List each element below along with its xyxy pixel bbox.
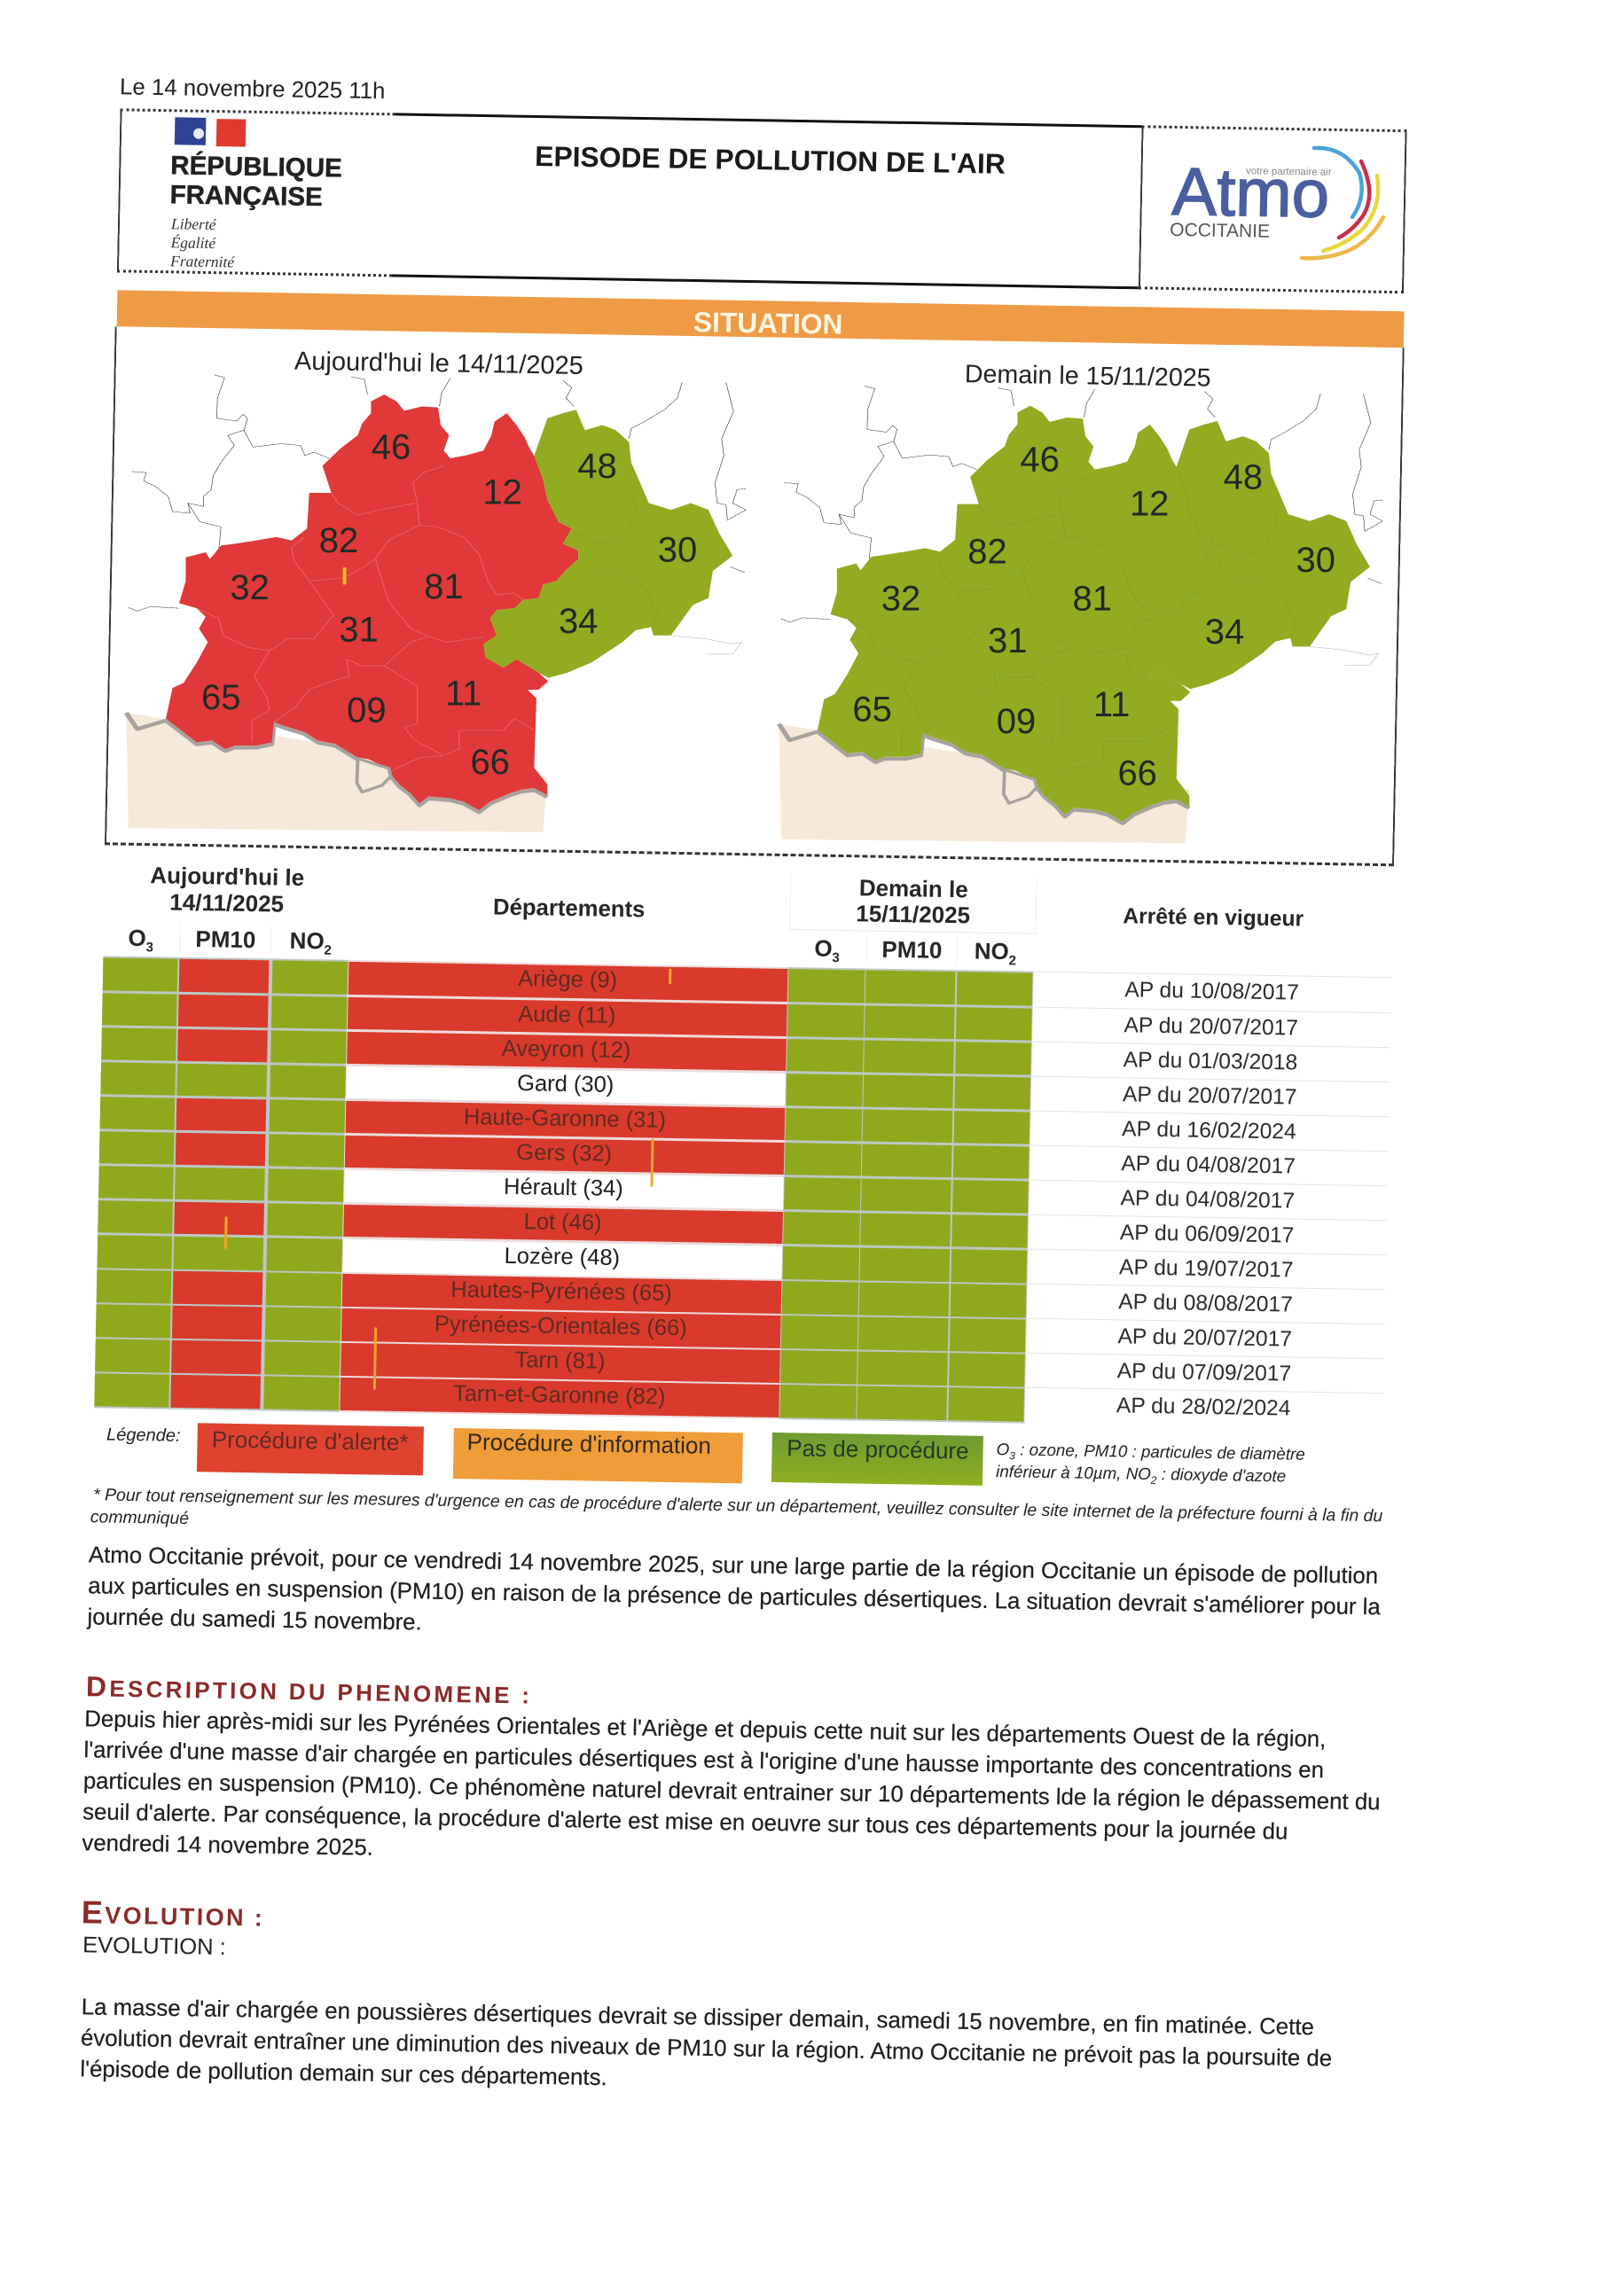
row: Tarn-et-Garonne: AP du 28/02/2024: [1116, 1394, 1291, 1421]
row: Pyrénées-Orientales: [96, 1304, 1390, 1358]
table head: tomorrow NO2: NO2: [974, 937, 1016, 968]
row: Tarn: Tarn (81): [514, 1347, 606, 1374]
legend note: O3 : ozone, PM10 : particules de diamètre: [996, 1440, 1305, 1464]
legend item: alert: [196, 1424, 424, 1476]
bar label: SITUATION: [693, 306, 843, 340]
legend item: none: Pas de procédure: [787, 1435, 969, 1464]
title: EPISODE DE POLLUTION DE L'AIR: [535, 140, 1006, 180]
row: Aveyron: Aveyron (12): [502, 1035, 631, 1063]
evolution paragraph: évolution devrait entraîner une diminution des niveaux de PM10 sur la région. Atmo Occitanie ne prévoit pas la poursuite de: [81, 2026, 1332, 2072]
row: Tarn: [95, 1339, 1390, 1393]
icon: Atmo arcs: [1295, 142, 1392, 266]
map numbers tomorrow: 34: [1205, 613, 1244, 652]
map numbers tomorrow: [852, 440, 1335, 793]
row: Gard: Gard (30): [517, 1071, 615, 1097]
table head: decree: Arrêté en vigueur: [1123, 904, 1304, 932]
intro paragraph: Atmo Occitanie prévoit, pour ce vendredi 14 novembre 2025, sur une large partie de la région Occitanie un épisode de pollution: [89, 1542, 1378, 1589]
footnote: communiqué: [90, 1507, 189, 1528]
legend note: inférieur à 10µm, NO2 : dioxyde d'azote: [996, 1462, 1286, 1487]
table head: today: [150, 862, 304, 918]
map numbers tomorrow: 31: [988, 621, 1028, 660]
row: Hérault: Hérault (34): [504, 1175, 623, 1201]
panel: Atmo logo: [1139, 125, 1407, 293]
row: Ariège: AP du 10/08/2017: [1124, 979, 1299, 1005]
row: Gard: [100, 1062, 1390, 1110]
panel: title: [392, 113, 1142, 289]
map: tomorrow: [763, 337, 1419, 869]
table grid: departments column: [339, 960, 787, 1419]
table head: tomorrow PM10: PM10: [881, 936, 943, 964]
table: [94, 862, 1392, 1424]
map numbers today: 48: [577, 447, 617, 486]
description paragraph: seuil d'alerte. Par conséquence, la procédure d'alerte est mise en oeuvre sur tous ces départements pour la journée du: [82, 1800, 1288, 1845]
table head: today PM10: [180, 925, 271, 953]
section bar: situation: [117, 290, 1404, 348]
logo wordmark: Atmo: [1171, 154, 1330, 232]
intro paragraph: [87, 1540, 1382, 1654]
footnote: * Pour tout renseignement sur les mesures d'urgence en cas de procédure d'alerte sur un département, veuillez consulter le site internet de la préfecture fourni à la fin du: [93, 1485, 1383, 1526]
footnote: [90, 1484, 1395, 1550]
map numbers today: 82: [319, 521, 358, 560]
row: Aveyron: AP du 01/03/2018: [1123, 1048, 1298, 1074]
date: Le 14 novembre 2025 11h: [120, 74, 386, 104]
map numbers today: 66: [470, 743, 510, 782]
evolution paragraph: [80, 1992, 1333, 2106]
table head: tomorrow PM10: [866, 935, 958, 964]
row: Hautes-Pyrénées: [97, 1269, 1390, 1324]
row: Gers: Gers (32): [516, 1140, 612, 1167]
map numbers today: 34: [559, 602, 598, 641]
map numbers tomorrow: 32: [881, 579, 920, 618]
table head: departments: Départements: [493, 895, 646, 922]
evolution label: EVOLUTION :: [82, 1933, 226, 1960]
legend item: alert: Procédure d'alerte*: [212, 1425, 409, 1456]
row: Aude: [101, 993, 1391, 1041]
row: Gers: [99, 1131, 1389, 1179]
row: Gers: AP du 04/08/2017: [1121, 1152, 1296, 1178]
table head: today: 14/11/2025: [169, 888, 284, 918]
map numbers today: 09: [347, 691, 387, 730]
row: Lot: Lot (46): [523, 1209, 602, 1236]
icon: French flag: [174, 117, 247, 147]
row: Hérault: AP du 04/08/2017: [1120, 1186, 1295, 1213]
map numbers today: 65: [201, 678, 241, 717]
motto: Fraternité: [170, 252, 234, 270]
table grid: tomorrow columns: [779, 967, 1033, 1424]
legend label: Légende:: [106, 1425, 181, 1446]
map shapes tomorrow: [779, 386, 1382, 843]
row: Aude: AP du 20/07/2017: [1124, 1013, 1298, 1040]
map numbers tomorrow: 09: [997, 702, 1036, 741]
map numbers today: 32: [230, 568, 270, 607]
map numbers tomorrow: 66: [1117, 754, 1157, 793]
map numbers tomorrow: 82: [967, 533, 1007, 572]
panel: maps frame: [105, 326, 1405, 866]
row: Hérault: [98, 1166, 1393, 1220]
intro paragraph: aux particules en suspension (PM10) en raison de la présence de particules désertiques. La situation devrait s'améliorer pour la: [88, 1574, 1381, 1620]
row: Aveyron: [101, 1027, 1390, 1075]
intro paragraph: journée du samedi 15 novembre.: [87, 1605, 422, 1635]
map title: today: Aujourd'hui le 14/11/2025: [294, 348, 583, 380]
row: Tarn: AP du 07/09/2017: [1116, 1359, 1291, 1386]
map numbers tomorrow: 81: [1073, 579, 1112, 618]
description paragraph: l'arrivée d'une masse d'air chargée en particules désertiques est à l'origine d'une hausse importante des concentrations en: [83, 1738, 1324, 1783]
map numbers tomorrow: 30: [1296, 541, 1335, 580]
heading: evolution: EVOLUTION :: [82, 1894, 265, 1932]
table head: tomorrow: [789, 874, 1037, 934]
row: Aude: Aude (11): [518, 1002, 616, 1027]
legend item: information: [453, 1428, 743, 1483]
table grid: today columns: [94, 956, 348, 1412]
map shapes today: [126, 375, 746, 832]
evolution paragraph: La masse d'air chargée en poussières désertiques devrait se dissiper demain, samedi 15 novembre, en fin matinée. Cette: [81, 1995, 1314, 2040]
row: Tarn-et-Garonne: [94, 1373, 1389, 1427]
map: today: [0, 0, 798, 851]
legend note: [996, 1438, 1305, 1488]
row: Haute-Garonne: Haute-Garonne (31): [464, 1105, 666, 1132]
row: Lozère: [97, 1235, 1391, 1289]
map numbers today: 12: [482, 473, 522, 512]
table head: today NO2: NO2: [289, 926, 332, 957]
map numbers tomorrow: 65: [852, 690, 892, 729]
heading: description: DESCRIPTION DU PHENOMENE :: [86, 1670, 533, 1709]
panel: République Française: [117, 108, 395, 277]
map numbers today: 46: [372, 428, 411, 467]
map numbers today: 81: [424, 567, 464, 606]
map numbers tomorrow: 11: [1093, 685, 1130, 724]
motto: Liberté: [171, 215, 216, 233]
row: Gard: AP du 20/07/2017: [1123, 1082, 1297, 1109]
row: Pyrénées-Orientales: Pyrénées-Orientales (66): [435, 1312, 687, 1340]
row: Lot: [98, 1200, 1392, 1254]
map numbers today: [201, 428, 697, 782]
map numbers today: 11: [445, 675, 482, 714]
row: Ariège: [103, 957, 1392, 1006]
row: Tarn-et-Garonne: Tarn-et-Garonne (82): [453, 1381, 666, 1410]
logo sublabel: votre partenaire air: [1246, 166, 1332, 177]
row: Haute-Garonne: [99, 1097, 1389, 1144]
table head: today: Aujourd'hui le: [150, 862, 304, 891]
row: Ariège: Ariège (9): [518, 966, 617, 993]
legend item: information: Procédure d'information: [466, 1429, 711, 1459]
row: Lozère: Lozère (48): [504, 1244, 620, 1270]
row: Haute-Garonne: AP du 16/02/2024: [1122, 1117, 1296, 1144]
map numbers tomorrow: 46: [1020, 440, 1060, 479]
motto: [170, 215, 235, 270]
map numbers tomorrow: 12: [1130, 484, 1169, 523]
table head: tomorrow: 15/11/2025: [856, 900, 970, 928]
logo region name: OCCITANIE: [1170, 219, 1270, 241]
row: Hautes-Pyrénées: AP du 08/08/2017: [1118, 1290, 1293, 1317]
map numbers today: 31: [339, 611, 379, 650]
row: Hautes-Pyrénées: Hautes-Pyrénées (65): [450, 1277, 672, 1306]
map title: tomorrow: Demain le 15/11/2025: [965, 360, 1211, 392]
description paragraph: vendredi 14 novembre 2025.: [82, 1831, 373, 1861]
table head: today O3: O3: [128, 924, 153, 955]
header band: [117, 108, 1406, 294]
description paragraph: [82, 1704, 1382, 1880]
table head: today PM10: PM10: [195, 925, 256, 953]
evolution paragraph: l'épisode de pollution demain sur ces départements.: [80, 2057, 607, 2090]
logo text: République Française: RÉPUBLIQUE: [170, 151, 342, 183]
table head: tomorrow O3: O3: [814, 935, 840, 965]
row: Lot: AP du 06/09/2017: [1120, 1221, 1295, 1247]
table head: tomorrow: Demain le: [859, 874, 968, 902]
legend: [104, 1416, 1390, 1499]
legend item: none: [771, 1433, 983, 1486]
row: Pyrénées-Orientales: AP du 20/07/2017: [1117, 1324, 1292, 1352]
map numbers today: 30: [658, 531, 697, 570]
description paragraph: Depuis hier après-midi sur les Pyrénées Orientales et l'Ariège et depuis cette nuit sur les départements Ouest de la région,: [84, 1706, 1327, 1752]
motto: Égalité: [170, 233, 215, 252]
map numbers tomorrow: 48: [1224, 457, 1263, 496]
description paragraph: particules en suspension (PM10). Ce phénomène naturel devrait entrainer sur 10 départements lde la région le dépassement du: [83, 1769, 1381, 1815]
logo text: République Française: [169, 151, 342, 212]
row: Lozère: AP du 19/07/2017: [1119, 1255, 1294, 1283]
logo text: République Française: FRANÇAISE: [169, 180, 323, 212]
